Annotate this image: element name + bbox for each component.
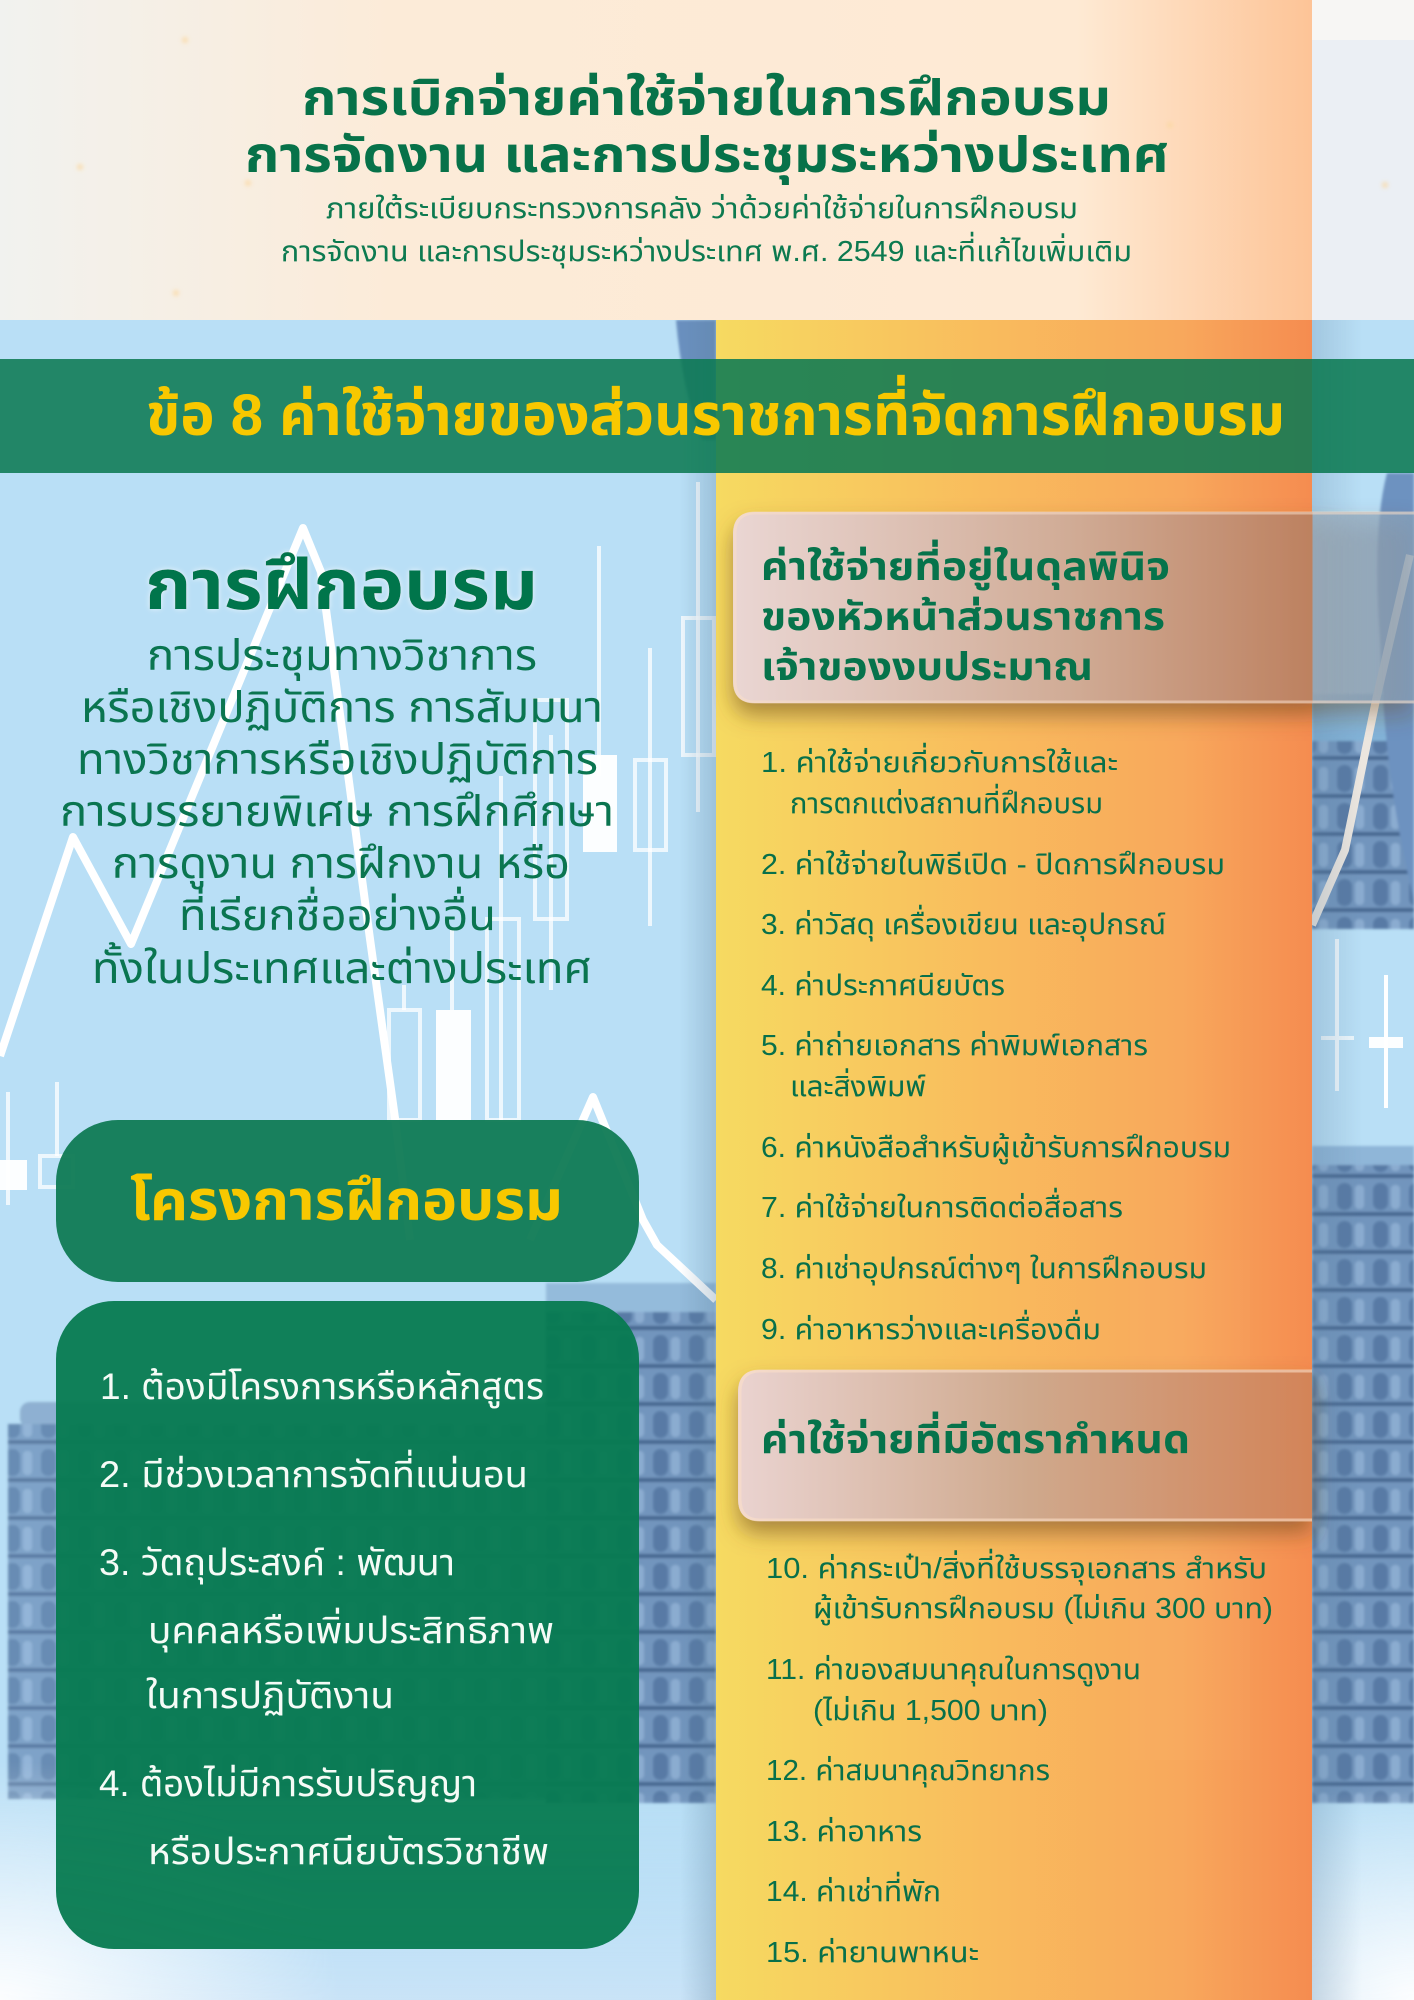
banner <box>0 359 1414 473</box>
pill: project heading: โครงการฝึกอบรม <box>130 1169 563 1232</box>
panel: project requirements: 4. ต้องไม่มีการรับปริญญา <box>99 1763 477 1804</box>
list: fixed-rate expenses items 10-15: ผู้เข้ารับการฝึกอบรม (ไม่เกิน 300 บาท) <box>813 1593 1273 1626</box>
panel: fixed-rate expenses heading <box>738 1370 1312 1521</box>
list: fixed-rate expenses items 10-15: 12. ค่าสมนาคุณวิทยากร <box>766 1755 1050 1787</box>
panel: fixed-rate expenses heading: ค่าใช้จ่ายที่มีอัตรากำหนด <box>761 1411 1190 1462</box>
text block: definition of training: การบรรยายพิเศษ การฝึกศึกษา <box>60 788 614 836</box>
panel: project requirements: บุคคลหรือเพิ่มประสิทธิภาพ <box>148 1607 554 1653</box>
list: discretionary expenses items 1-9: การตกแต่งสถานที่ฝึกอบรม <box>790 783 1103 820</box>
list: discretionary expenses items 1-9: 4. ค่าประกาศนียบัตร <box>761 970 1005 1002</box>
panel: project requirements: ในการปฏิบัติงาน <box>146 1675 394 1716</box>
list: fixed-rate expenses items 10-15 <box>766 1548 1273 1969</box>
title: การจัดงาน และการประชุมระหว่างประเทศ <box>245 127 1169 185</box>
list: discretionary expenses items 1-9 <box>761 742 1231 1346</box>
list: fixed-rate expenses items 10-15: 11. ค่าของสมนาคุณในการดูงาน <box>766 1654 1141 1687</box>
background: coin stacks <box>8 320 1414 1803</box>
panel: yellow-orange column <box>680 320 1362 2000</box>
list: discretionary expenses items 1-9: 5. ค่าถ่ายเอกสาร ค่าพิมพ์เอกสาร <box>761 1030 1148 1062</box>
text block: definition of training: หรือเชิงปฏิบัติการ การสัมมนา <box>81 684 603 732</box>
list: discretionary expenses items 1-9: และสิ่งพิมพ์ <box>790 1068 926 1103</box>
subtitle: ภายใต้ระเบียบกระทรวงการคลัง ว่าด้วยค่าใช้จ่ายในการฝึกอบรม <box>326 193 1078 225</box>
panel: project requirements: 2. มีช่วงเวลาการจัดที่แน่นอน <box>99 1449 528 1495</box>
text block: definition of training: ทางวิชาการหรือเชิงปฏิบัติการ <box>77 736 598 784</box>
list: discretionary expenses items 1-9: 6. ค่าหนังสือสำหรับผู้เข้ารับการฝึกอบรม <box>761 1132 1231 1165</box>
list: fixed-rate expenses items 10-15: (ไม่เกิน 1,500 บาท) <box>813 1695 1048 1727</box>
panel: project requirements: 1. ต้องมีโครงการหรือหลักสูตร <box>100 1366 544 1409</box>
list: fixed-rate expenses items 10-15: 14. ค่าเช่าที่พัก <box>766 1871 941 1908</box>
text block: definition of training: ทั้งในประเทศและต่างประเทศ <box>92 941 592 993</box>
text block: definition of training: ที่เรียกชื่ออย่างอื่น <box>179 886 496 940</box>
list: discretionary expenses items 1-9: 3. ค่าวัสดุ เครื่องเขียน และอุปกรณ์ <box>761 904 1166 941</box>
panel: discretionary expenses heading <box>733 512 1414 703</box>
background: candlestick chart and trend line <box>0 482 1410 1300</box>
list: discretionary expenses items 1-9: 7. ค่าใช้จ่ายในการติดต่อสื่อสาร <box>761 1187 1123 1224</box>
list: discretionary expenses items 1-9: 2. ค่าใช้จ่ายในพิธีเปิด - ปิดการฝึกอบรม <box>761 849 1225 881</box>
panel: discretionary expenses heading: ของหัวหน้าส่วนราชการ <box>761 596 1165 639</box>
list: fixed-rate expenses items 10-15: 10. ค่ากระเป๋า/สิ่งที่ใช้บรรจุเอกสาร สำหรับ <box>766 1548 1267 1585</box>
panel: project requirements <box>56 1301 639 1949</box>
text block: definition of training <box>60 632 614 993</box>
background: pale bottom fade <box>0 1760 1414 2000</box>
header band: top title background <box>0 0 1414 320</box>
text block: definition of training: การประชุมทางวิชาการ <box>147 632 537 681</box>
subtitle: การจัดงาน และการประชุมระหว่างประเทศ พ.ศ. 2549 และที่แก้ไขเพิ่มเติม <box>281 231 1132 268</box>
list: fixed-rate expenses items 10-15: 13. ค่าอาหาร <box>766 1816 922 1848</box>
list: discretionary expenses items 1-9: 8. ค่าเช่าอุปกรณ์ต่างๆ ในการฝึกอบรม <box>761 1253 1207 1285</box>
banner: ข้อ 8 ค่าใช้จ่ายของส่วนราชการที่จัดการฝึกอบรม <box>146 374 1285 448</box>
list: discretionary expenses items 1-9: 9. ค่าอาหารว่างและเครื่องดื่ม <box>761 1309 1101 1346</box>
title <box>245 70 1169 185</box>
panel: project requirements: หรือประกาศนียบัตรวิชาชีพ <box>148 1831 549 1872</box>
title: การเบิกจ่ายค่าใช้จ่ายในการฝึกอบรม <box>302 70 1111 126</box>
subtitle <box>281 193 1132 268</box>
list: fixed-rate expenses items 10-15: 15. ค่ายานพาหนะ <box>766 1937 979 1969</box>
list: discretionary expenses items 1-9: 1. ค่าใช้จ่ายเกี่ยวกับการใช้และ <box>761 742 1118 779</box>
pill: project heading <box>56 1120 639 1282</box>
panel: project requirements: 3. วัตถุประสงค์ : พัฒนา <box>99 1542 455 1585</box>
heading: training: การฝึกอบรม <box>145 546 538 624</box>
text block: definition of training: การดูงาน การฝึกงาน หรือ <box>112 840 570 889</box>
panel: discretionary expenses heading: ค่าใช้จ่ายที่อยู่ในดุลพินิจ <box>761 539 1170 590</box>
panel: discretionary expenses heading: เจ้าของงบประมาณ <box>761 646 1093 689</box>
